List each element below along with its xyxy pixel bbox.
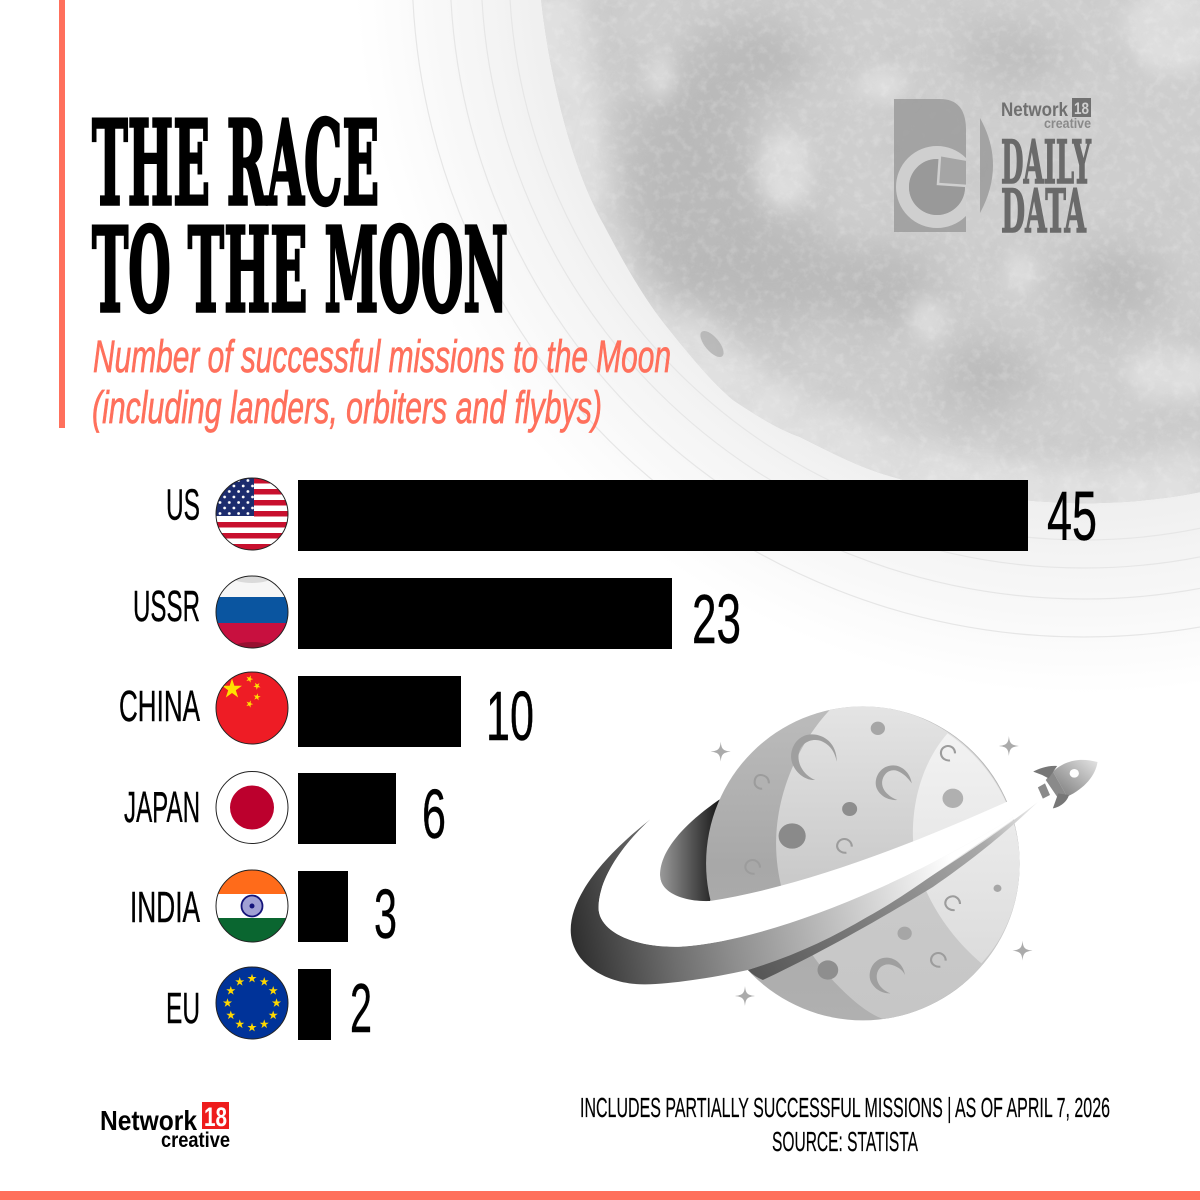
subtitle: (including landers, orbiters and flybys)	[92, 382, 602, 433]
value: 6: 6	[422, 775, 446, 853]
icon: Russia flag	[216, 576, 288, 648]
ring white band	[599, 791, 1038, 947]
text: DATA	[1001, 177, 1087, 247]
row: USSR	[134, 576, 740, 649]
ring swoosh shadow	[571, 802, 1038, 984]
footnote and source	[580, 1092, 1110, 1157]
moon photo	[530, 0, 1200, 520]
value: 23: 23	[692, 580, 741, 658]
icon: EU flag	[216, 967, 288, 1039]
row: EU	[166, 967, 372, 1047]
icon: India flag	[216, 870, 288, 942]
title: THE RACE	[92, 96, 379, 232]
bar: Japan 6	[298, 773, 396, 844]
bar chart	[119, 477, 1097, 1047]
bar: US 45	[298, 480, 1028, 551]
icon: US flag	[216, 478, 288, 550]
network 18 creative	[1001, 98, 1091, 131]
logo: Network18 creative: 18	[204, 1102, 227, 1132]
icon: China flag	[216, 672, 288, 744]
row: USSR: USSR	[133, 582, 200, 631]
network 18 creative: Network	[1001, 100, 1068, 121]
value: 10: 10	[486, 677, 534, 755]
row: EU: EU	[166, 984, 200, 1033]
left accent bar	[59, 0, 65, 428]
daily data wordmark	[1001, 128, 1092, 247]
row: Japan: JAPAN	[124, 783, 200, 832]
subtitle	[92, 331, 671, 433]
row: US: US	[166, 480, 200, 530]
row: China	[119, 672, 534, 755]
network 18 creative: 18	[1074, 99, 1089, 118]
title	[92, 96, 508, 339]
bottom accent bar	[0, 1191, 1200, 1200]
value: 3: 3	[374, 875, 397, 953]
icon: rocket	[1033, 760, 1097, 808]
planet body	[706, 706, 1020, 1020]
craters	[745, 722, 1001, 993]
logo: Network18 creative	[100, 1102, 230, 1152]
icon: d mark	[894, 99, 993, 232]
logo: Daily Data	[894, 98, 1092, 247]
bar: India 3	[298, 871, 348, 942]
back ring	[660, 799, 721, 901]
network 18 creative: creative	[1044, 115, 1091, 131]
row: US	[166, 477, 1097, 555]
bar: EU 2	[298, 969, 331, 1040]
row: India	[132, 870, 396, 942]
illustration: planet with ring and rocket	[571, 706, 1097, 1020]
text: TO THE MOON	[92, 203, 508, 339]
bar: USSR 23	[298, 578, 672, 649]
row: India: INDIA	[130, 883, 200, 932]
row: Japan	[124, 772, 446, 853]
icon: Japan flag	[216, 772, 288, 844]
logo: Network18 creative: creative	[161, 1129, 230, 1152]
value: 2: 2	[350, 969, 372, 1047]
row: China: CHINA	[119, 682, 200, 731]
dark strip of ring	[748, 802, 1038, 980]
icon: sparkle stars	[711, 736, 1032, 1006]
logo: Network18 creative: Network	[100, 1105, 197, 1136]
subtitle: Number of successful missions to the Moon	[93, 331, 671, 382]
value: 45: 45	[1047, 477, 1097, 555]
footnote and source: SOURCE: STATISTA	[772, 1126, 918, 1157]
moon halo and orbit rings	[354, 0, 1200, 695]
bar: China 10	[298, 676, 461, 747]
